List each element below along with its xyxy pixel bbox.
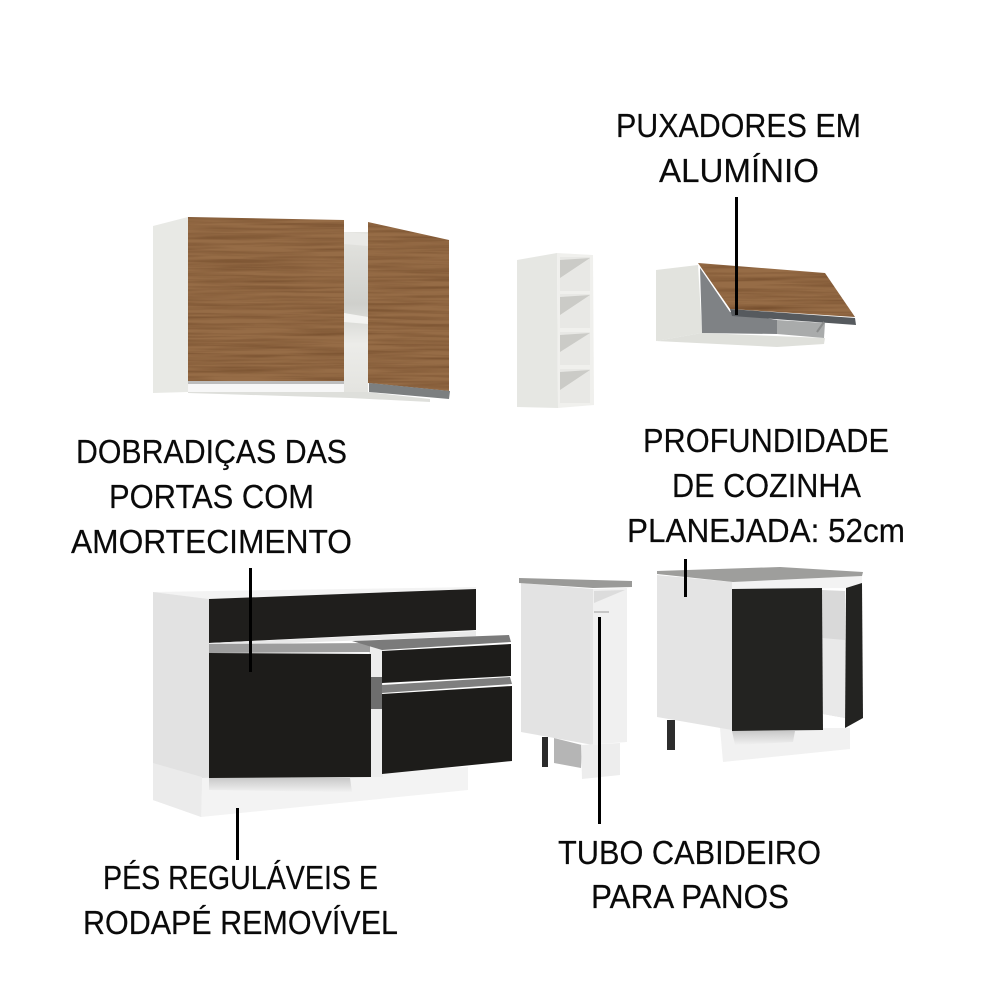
bottom edge — [188, 391, 430, 402]
overhead bottom — [656, 333, 825, 347]
label: tubo cabideiro: PARA PANOS — [591, 878, 789, 915]
label: puxadores em alumínio: PUXADORES EM — [616, 107, 861, 144]
label: dobradiças das portas: PORTAS COM — [109, 478, 314, 515]
label: profundidade: PLANEJADA: 52cm — [627, 512, 905, 549]
countertop — [657, 567, 863, 582]
side panel — [657, 575, 732, 730]
niche cell 4 — [560, 369, 590, 403]
niche side — [517, 253, 558, 408]
niche cell 1 — [560, 257, 590, 291]
top opening — [594, 590, 625, 603]
flip-up wall cabinet — [656, 263, 856, 347]
niche front — [557, 253, 594, 408]
leg — [542, 737, 548, 767]
closed wood door — [188, 217, 344, 381]
plinth side — [153, 763, 202, 817]
plinth front — [201, 767, 468, 817]
label: profundidade: PROFUNDIDADE — [643, 422, 889, 459]
open niche cabinet — [517, 253, 594, 408]
label: tubo cabideiro: TUBO CABIDEIRO — [558, 834, 821, 871]
under-door white handle — [188, 381, 344, 392]
side panel — [521, 583, 593, 745]
aluminium handle on open door — [369, 383, 450, 399]
flap support arm — [817, 322, 824, 332]
label: dobradiças das portas: AMORTECIMENTO — [71, 523, 352, 560]
niche cell 2 — [560, 294, 590, 328]
callout line: tubo cabideiro — [598, 617, 601, 824]
base cabinet top — [153, 587, 476, 599]
top black drawer — [209, 589, 476, 643]
label: pés reguláveis: PÉS REGULÁVEIS E — [103, 859, 378, 896]
lower drawer — [382, 686, 512, 774]
front leg — [667, 720, 675, 750]
front panel — [584, 588, 627, 745]
label: profundidade — [627, 422, 905, 549]
plinth left — [554, 738, 582, 768]
white band — [209, 631, 476, 646]
overhead side — [656, 265, 702, 341]
lower drawer handle — [382, 677, 512, 693]
callout line: profundidade — [684, 559, 687, 597]
label: dobradiças das portas — [71, 433, 352, 560]
base cabinet side — [153, 592, 209, 817]
cabinet interior — [344, 232, 368, 392]
label: pés reguláveis — [83, 859, 398, 941]
aluminium flap handle — [730, 309, 856, 325]
niche cell 3 — [560, 332, 590, 365]
label: tubo cabideiro — [558, 834, 821, 915]
plinth front — [581, 743, 620, 779]
upper drawer — [382, 644, 511, 683]
black door — [732, 588, 823, 731]
plinth — [720, 728, 850, 762]
label: puxadores em alumínio: ALUMÍNIO — [659, 152, 819, 189]
grey door handle — [209, 643, 370, 653]
inner white strip — [732, 576, 862, 589]
plinth shadow — [732, 731, 795, 745]
countertop — [519, 578, 632, 588]
overhead interior light — [777, 320, 825, 338]
label: dobradiças das portas: DOBRADIÇAS DAS — [76, 433, 347, 470]
corner base cabinet — [657, 567, 863, 762]
callout line: dobradiças — [249, 568, 252, 672]
overhead interior dark — [700, 268, 777, 334]
narrow base cabinet — [519, 578, 632, 779]
plinth shadow — [209, 778, 352, 792]
hanging tube — [594, 611, 609, 613]
upper drawer handle — [352, 635, 511, 650]
wood flap door — [698, 263, 855, 317]
label: profundidade: DE COZINHA — [672, 467, 861, 504]
black door — [209, 653, 371, 778]
open black door — [845, 583, 863, 728]
callout line: pés reguláveis — [236, 808, 239, 860]
cabinet side panel — [153, 217, 188, 393]
callout line: puxadores — [735, 197, 738, 315]
cabinet interior gap — [369, 645, 383, 777]
handle line — [188, 381, 344, 384]
upper two-door wall cabinet — [153, 217, 450, 402]
open wood door — [368, 222, 449, 391]
large base cabinet with door and drawers — [153, 587, 512, 817]
interior — [822, 590, 845, 718]
label: puxadores em alumínio — [616, 107, 861, 189]
label: pés reguláveis: RODAPÉ REMOVÍVEL — [83, 904, 398, 941]
